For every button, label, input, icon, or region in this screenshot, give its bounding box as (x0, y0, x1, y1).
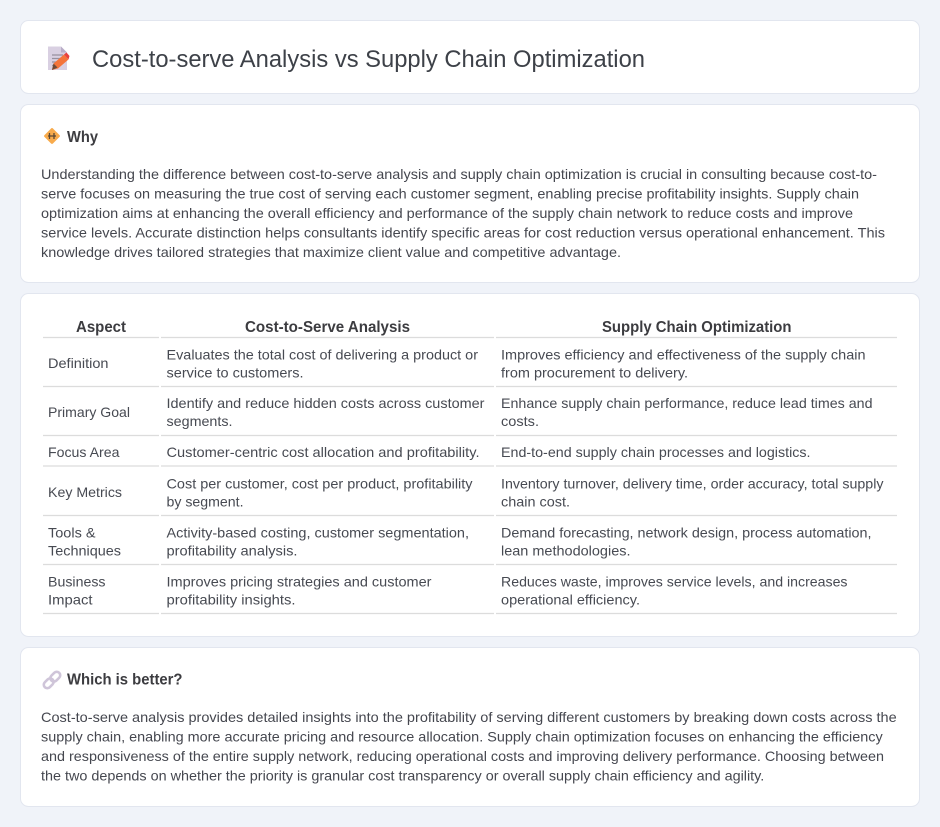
table row: primary goal: Enhance supply chain performance, reduce lead times and (501, 395, 872, 411)
table row: business impact: profitability insights. (166, 591, 296, 607)
table row: tools and techniques: profitability analysis. (166, 542, 298, 558)
table row: key metrics: Cost per customer, cost per product, profitability (166, 475, 473, 491)
table row: primary goal (48, 395, 872, 429)
text block: which is better paragraph: the two depends on whether the priority is granular cost transparency or overall supply chain efficiency and agility. (41, 768, 764, 784)
table row: focus area (48, 444, 810, 460)
text block: why paragraph: Understanding the difference between cost-to-serve analysis and supply chain optimization is crucial in consulting because cost-to- (41, 166, 877, 182)
text block: why paragraph (41, 166, 885, 260)
table row: definition: Improves efficiency and effectiveness of the supply chain (501, 346, 866, 362)
table row: tools and techniques (48, 524, 872, 558)
table row: primary goal: Identify and reduce hidden costs across customer (166, 395, 485, 411)
panel: why (20, 104, 920, 282)
heading: why: Why (67, 129, 98, 146)
table row: tools and techniques: Techniques (48, 542, 121, 558)
icon: chain link (42, 670, 62, 690)
text block: which is better paragraph: supply chain, enabling more accurate pricing and resource allocation. Supply chain optimization focuses on enhancing the efficiency (41, 728, 883, 744)
table row: definition: from procurement to delivery. (501, 364, 688, 380)
table row: tools and techniques: lean methodologies. (501, 542, 630, 558)
text block: why paragraph: knowledge drives tailored strategies that maximize client value and competitive advantage. (41, 244, 621, 260)
table row: definition (48, 346, 866, 380)
table row: definition: Definition (48, 355, 108, 371)
text block: why paragraph: service levels. Accurate distinction helps consultants identify specific areas for cost reduction versus operational enhancement. This (41, 224, 885, 240)
table row: tools and techniques: Activity-based costing, customer segmentation, (166, 524, 469, 540)
table row: key metrics: Inventory turnover, delivery time, order accuracy, total supply (501, 475, 884, 491)
table row: focus area: Customer-centric cost allocation and profitability. (166, 444, 480, 460)
icon: warning diamond (44, 128, 60, 144)
text block: which is better paragraph (41, 709, 897, 784)
table row: primary goal: Primary Goal (48, 404, 130, 420)
table header row: Supply Chain Optimization (602, 319, 792, 336)
table row: focus area: End-to-end supply chain processes and logistics. (501, 444, 810, 460)
table row: business impact (48, 573, 848, 607)
panel: title card (20, 20, 920, 94)
panel: which is better (20, 648, 920, 806)
table header row: Aspect (76, 319, 127, 336)
panel: comparison table (20, 294, 920, 636)
table row: key metrics: Key Metrics (48, 484, 122, 500)
table header row (76, 319, 792, 336)
table row: business impact: Improves pricing strategies and customer (166, 573, 432, 589)
table row: key metrics: chain cost. (501, 493, 570, 509)
table row: key metrics (48, 475, 884, 509)
table row: key metrics: by segment. (166, 493, 244, 509)
table row: primary goal: segments. (166, 413, 232, 429)
table row: tools and techniques: Tools & (48, 524, 96, 540)
table row: business impact: Impact (48, 591, 93, 607)
table row: primary goal: costs. (501, 413, 539, 429)
table row: definition: Evaluates the total cost of delivering a product or (166, 346, 478, 362)
icon: memo with pencil (48, 46, 70, 70)
table row: focus area: Focus Area (48, 444, 120, 460)
text block: why paragraph: serve focuses on measuring the true cost of serving each customer segment, enabling precise profitability insights. Supply chain (41, 186, 859, 202)
table header row: Cost-to-Serve Analysis (245, 319, 410, 336)
text block: why paragraph: optimization aims at enhancing the overall efficiency and performance of the supply chain network to reduce costs and improve (41, 205, 853, 221)
table row: business impact: operational efficiency. (501, 591, 640, 607)
table row: business impact: Business (48, 573, 106, 589)
title: Cost-to-serve Analysis vs Supply Chain Optimization (92, 46, 645, 73)
table row: definition: service to customers. (166, 364, 304, 380)
table row: business impact: Reduces waste, improves service levels, and increases (501, 573, 848, 589)
text block: which is better paragraph: and responsiveness of the entire supply network, reducing operational costs and improving delivery performance. Choosing between (41, 748, 884, 764)
text block: which is better paragraph: Cost-to-serve analysis provides detailed insights into the profitability of serving different customers by breaking down costs across the (41, 709, 897, 725)
table row: tools and techniques: Demand forecasting, network design, process automation, (501, 524, 872, 540)
heading: which is better: Which is better? (67, 671, 182, 688)
